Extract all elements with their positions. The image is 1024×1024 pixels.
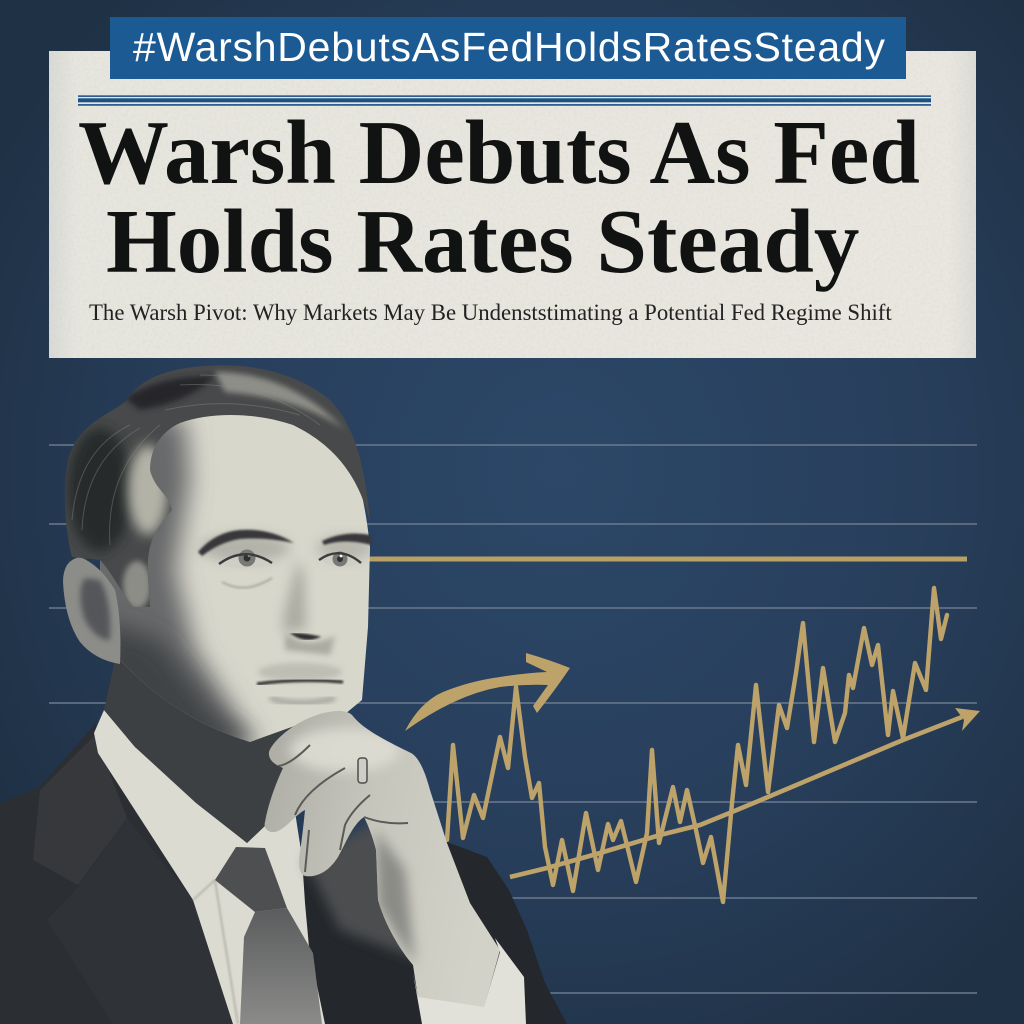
grey temple hair (128, 445, 168, 535)
forearm edge shade (376, 830, 415, 965)
nose underside (285, 633, 335, 655)
nostril (293, 634, 318, 639)
ring (358, 758, 367, 783)
eye left (219, 550, 272, 588)
lower lapel (47, 818, 233, 1024)
upper lip shading (258, 663, 342, 681)
trend arrow (510, 708, 980, 877)
subheading: The Warsh Pivot: Why Markets May Be Undenststimating a Potential Fed Regime Shift (89, 300, 892, 325)
upper lapel (33, 735, 127, 885)
chart grid lines (49, 445, 977, 993)
jaw shadow (120, 616, 263, 742)
collar edge shadow (193, 880, 238, 1024)
double rule (78, 95, 931, 106)
finger creases (278, 745, 408, 872)
shirt cuff (413, 938, 526, 1024)
forearm shade (305, 820, 420, 960)
neck shadow (104, 590, 340, 843)
ear (63, 557, 120, 664)
face (100, 415, 370, 742)
hair (64, 365, 370, 607)
jacket right side (300, 842, 567, 1024)
nose shadow (282, 560, 306, 632)
gold horizontal line (367, 556, 967, 562)
headline panel (49, 51, 976, 358)
dark side hair (68, 428, 132, 552)
face shadow side (100, 418, 263, 742)
grey crown highlight (215, 372, 345, 430)
eye socket shading (200, 534, 290, 562)
paper texture (49, 51, 976, 358)
portrait of man (0, 355, 567, 1024)
headline (78, 102, 920, 292)
shirt (94, 710, 325, 1024)
dark top swoop (125, 376, 215, 410)
tie (215, 847, 322, 1024)
jacket left side (0, 723, 233, 1024)
eyebrow left (198, 530, 294, 556)
headline: Warsh Debuts As Fed (78, 102, 920, 203)
hair strands (72, 375, 325, 545)
hand (264, 711, 500, 1007)
curved arrow (405, 653, 570, 731)
mouth (257, 680, 343, 703)
gold price line (447, 588, 947, 902)
headline: Holds Rates Steady (106, 191, 859, 292)
eyebrow right (322, 533, 371, 545)
eye right (319, 552, 361, 566)
grey sideburn (123, 561, 151, 609)
fist highlight (290, 728, 400, 772)
hashtag banner: #WarshDebutsAsFedHoldsRatesSteady (133, 24, 886, 70)
